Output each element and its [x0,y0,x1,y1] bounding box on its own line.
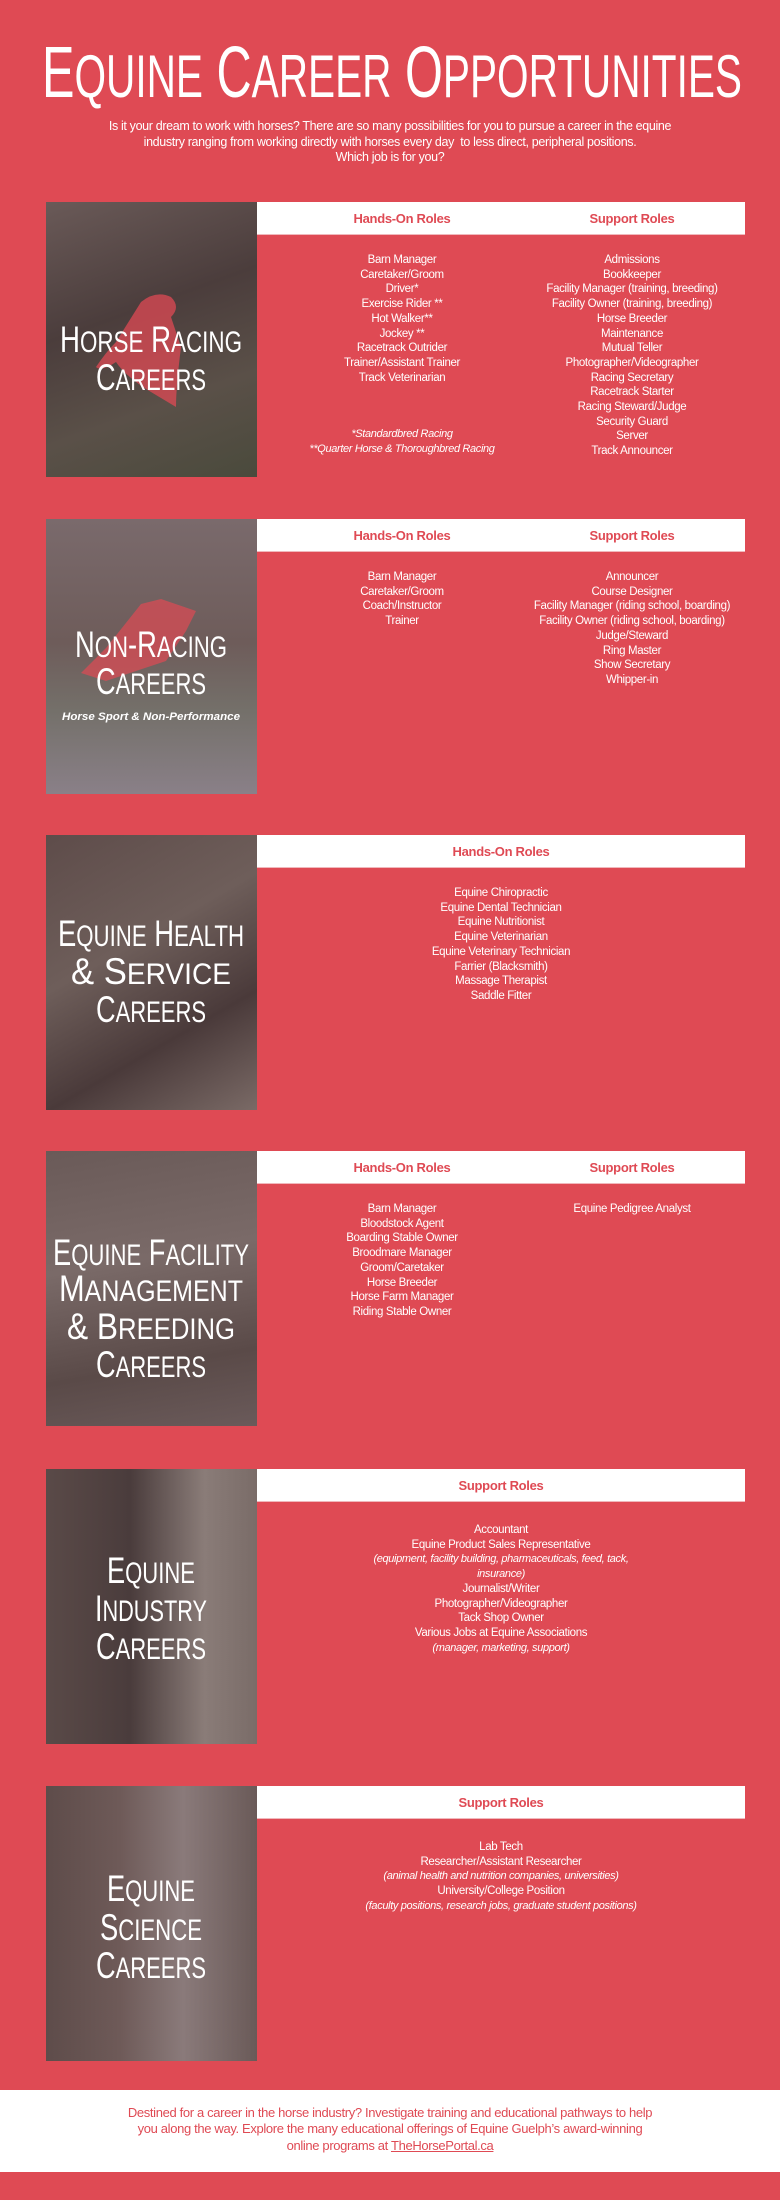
list: hands-on [344,254,460,384]
list: support: Facility Owner (riding school, boarding) [539,615,725,627]
list: support: (faculty positions, research jobs, graduate student positions) [365,1900,637,1912]
list: hands-on: Track Veterinarian [359,372,445,384]
list: support: Lab Tech [479,1841,523,1853]
list: support: Bookkeeper [603,269,661,281]
list: hands-on [432,887,570,1002]
list: hands-on: Jockey ** [380,328,424,340]
list: hands-on: Groom/Caretaker [360,1262,444,1274]
header bar [257,519,745,552]
panel: non-racing [46,519,745,794]
list: hands-on: Boarding Stable Owner [346,1232,458,1244]
list: hands-on: Broodmare Manager [352,1247,452,1259]
header bar [257,835,745,868]
panel: facility management [46,1151,745,1426]
list: support: Photographer/Videographer [566,357,698,369]
footer callout: you along the way. Explore the many educational offerings of Equine Guelph’s award-winning [138,2121,642,2136]
list: support: Facility Manager (riding school, boarding) [534,600,730,612]
list: hands-on: Equine Dental Technician [440,902,562,914]
list: hands-on: Horse Breeder [367,1277,437,1289]
list: support: Facility Owner (training, breeding) [552,298,712,310]
list: support [534,571,730,686]
header bar [257,202,745,235]
header bar: Support Roles [590,211,674,226]
list: support: Maintenance [601,328,663,340]
panel: science [46,1786,745,2061]
list: hands-on: Equine Veterinarian [454,931,548,943]
list: hands-on: Trainer/Assistant Trainer [344,357,460,369]
panel: industry [46,1469,745,1744]
list: hands-on: Horse Farm Manager [350,1291,453,1303]
list: support: Whipper-in [606,674,658,686]
list: support: Journalist/Writer [463,1583,539,1595]
image: science: EQUINE [107,1868,195,1909]
list: support: Researcher/Assistant Researcher [420,1856,582,1868]
list: support: (manager, marketing, support) [432,1642,570,1654]
list: support: Racing Steward/Judge [578,401,686,413]
list: hands-on: Farrier (Blacksmith) [454,961,548,973]
header bar [257,1786,745,1819]
image: non-racing: Horse Sport & Non-Performance [62,711,240,723]
image: science: CAREERS [96,1945,206,1986]
intro text: Is it your dream to work with horses? There are so many possibilities for you to pursue a career in the equine [109,119,671,133]
list: support: Photographer/Videographer [435,1598,567,1610]
image: industry: INDUSTRY [95,1588,207,1629]
list: support: Ring Master [603,645,661,657]
image: non-racing: CAREERS [96,661,206,702]
image: facility: CAREERS [96,1344,206,1385]
image: science: SCIENCE [100,1907,202,1948]
image: non-racing [46,519,257,794]
image: industry: EQUINE [107,1550,195,1591]
list: support: Admissions [604,254,660,266]
list: support: Equine Product Sales Representative [412,1539,590,1551]
list: hands-on: Barn Manager [368,571,436,583]
list: hands-on: Saddle Fitter [471,990,531,1002]
image: facility: & BREEDING [67,1306,235,1347]
list: hands-on: Caretaker/Groom [360,586,444,598]
image: facility [46,1151,257,1426]
header bar: Hands-On Roles [354,1160,450,1175]
header bar [257,1151,745,1184]
header bar: Hands-On Roles [354,528,450,543]
image: non-racing: NON-RACING [75,624,227,665]
list: support: (animal health and nutrition companies, universities) [383,1870,619,1882]
list: hands-on [346,1203,458,1318]
list: support: Facility Manager (training, breeding) [546,283,718,295]
list: support: Equine Pedigree Analyst [573,1203,691,1215]
list: hands-on: Coach/Instructor [363,600,441,612]
list: support [365,1841,637,1912]
header bar: Support Roles [459,1795,543,1810]
footnotes: *Standardbred Racing [351,428,453,440]
image: industry [46,1469,257,1744]
list: hands-on: Equine Chiropractic [454,887,548,899]
panel: health & service [46,835,745,1110]
list: support: Announcer [606,571,658,583]
footer callout: online programs at TheHorsePortal.ca [287,2138,493,2153]
image: health [46,835,257,1110]
header bar: Hands-On Roles [453,844,549,859]
footer callout: Destined for a career in the horse industry? Investigate training and educational pathways to help [128,2105,652,2120]
list: hands-on: Equine Nutritionist [458,916,544,928]
list: hands-on: Riding Stable Owner [353,1306,451,1318]
footnotes [309,428,495,455]
list: support: insurance) [477,1568,525,1580]
list: support: Various Jobs at Equine Associations [415,1627,587,1639]
list: support: Judge/Steward [596,630,668,642]
image: health: & SERVICE [71,951,231,992]
list: support: Racetrack Starter [590,386,674,398]
list: support: University/College Position [437,1885,565,1897]
panel: horse racing [46,202,745,477]
list: support: Horse Breeder [597,313,667,325]
list: support: Track Announcer [591,445,673,457]
header bar: Support Roles [459,1478,543,1493]
list: hands-on: Caretaker/Groom [360,269,444,281]
header bar: Support Roles [590,1160,674,1175]
list: hands-on: Massage Therapist [455,975,547,987]
list: support: Racing Secretary [591,372,673,384]
list: support: Server [616,430,648,442]
intro text: Which job is for you? [336,150,444,164]
list: hands-on: Racetrack Outrider [357,342,447,354]
footer callout [0,2090,780,2172]
image: health: CAREERS [96,989,206,1030]
list: support: Accountant [474,1524,528,1536]
header bar: Support Roles [590,528,674,543]
list: support: Security Guard [596,416,668,428]
list: hands-on: Hot Walker** [371,313,433,325]
list: support [546,254,718,457]
list: support: Tack Shop Owner [458,1612,544,1624]
header bar: Hands-On Roles [354,211,450,226]
image: horse racing [46,202,257,477]
intro text: industry ranging from working directly with horses every day to less direct, peripheral positions. [144,134,636,148]
list: hands-on [360,571,444,627]
list: support [373,1524,629,1654]
intro text [109,119,671,164]
list: hands-on: Exercise Rider ** [362,298,442,310]
footnotes: **Quarter Horse & Thoroughbred Racing [309,443,495,455]
list: support: (equipment, facility building, pharmaceuticals, feed, tack, [373,1553,629,1565]
list: hands-on: Driver* [386,283,418,295]
list: support: Mutual Teller [602,342,662,354]
list: support: Course Designer [591,586,673,598]
list: support: Show Secretary [594,659,670,671]
list: hands-on: Barn Manager [368,254,436,266]
list: hands-on: Equine Veterinary Technician [432,946,570,958]
list: hands-on: Bloodstock Agent [360,1218,444,1230]
image: industry: CAREERS [96,1626,206,1667]
image: horse racing: CAREERS [96,357,206,398]
list: hands-on: Barn Manager [368,1203,436,1215]
header bar [257,1469,745,1502]
image: science [46,1786,257,2061]
list: hands-on: Trainer [385,615,419,627]
